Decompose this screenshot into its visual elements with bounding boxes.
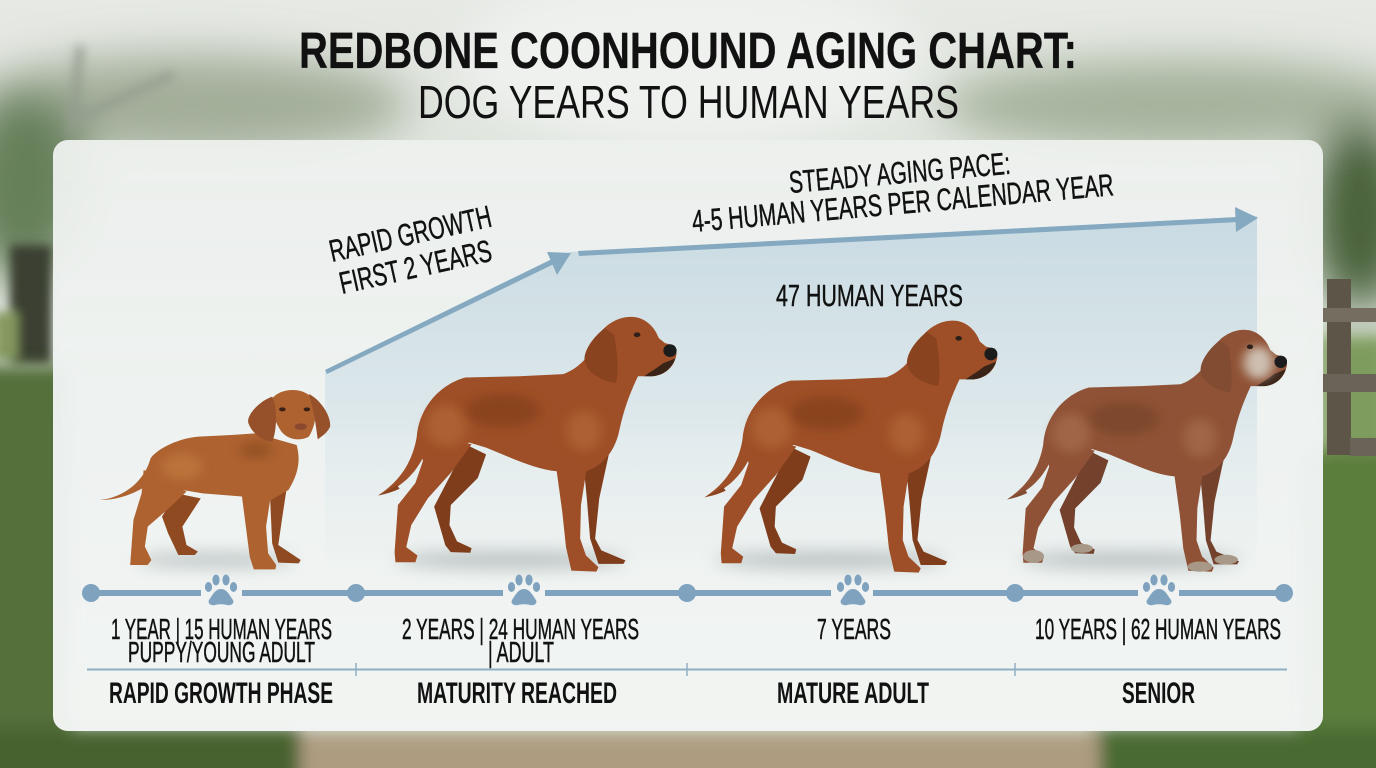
icon: paw 1 [205,574,237,605]
label: rapid growth: FIRST 2 YEARS [336,233,495,301]
timeline [82,574,1293,605]
phase: senior: SENIOR [1122,677,1195,710]
phase: rapid growth: RAPID GROWTH PHASE [109,677,333,710]
arrow: steady aging [578,207,1258,256]
column 2 age label [402,614,639,669]
floor shadows [135,551,1240,569]
dog: senior at 10 years [1007,330,1287,572]
label: steady aging pace: STEADY AGING PACE: [788,146,1012,200]
phase divider [87,663,1287,676]
panel: chart card [53,140,1323,731]
dog: puppy at 1 year [100,390,330,569]
column 1 age label [111,614,332,669]
column 2 age label: | ADULT [488,637,554,669]
arrow: rapid growth [325,252,571,374]
chart area wedge under aging curve [325,216,1257,600]
phase: mature adult: MATURE ADULT [777,677,929,710]
subtitle: DOG YEARS TO HUMAN YEARS [418,76,959,128]
column 1 age label: PUPPY/YOUNG ADULT [128,637,315,669]
column 3 age label: 7 YEARS [817,614,891,646]
dog: adult at 2 years [378,317,677,572]
icon: paw 4 [1143,574,1175,605]
column 1 age label: 1 YEAR | 15 HUMAN YEARS [111,614,332,646]
title: REDBONE COONHOUND AGING CHART: [299,22,1077,79]
label: steady aging pace [691,146,1115,239]
column 2 age label: 2 YEARS | 24 HUMAN YEARS [402,614,639,646]
dog: mature adult at 7 years [704,321,997,573]
label: 47 human years: 47 HUMAN YEARS [776,278,963,313]
icon: paw 2 [508,574,540,605]
label: rapid growth: RAPID GROWTH [326,199,495,269]
phase: maturity reached: MATURITY REACHED [417,677,617,710]
label: rapid growth [326,199,495,301]
icon: paw 3 [837,574,869,605]
label: steady aging pace: 4-5 HUMAN YEARS PER CALENDAR YEAR [691,167,1115,239]
